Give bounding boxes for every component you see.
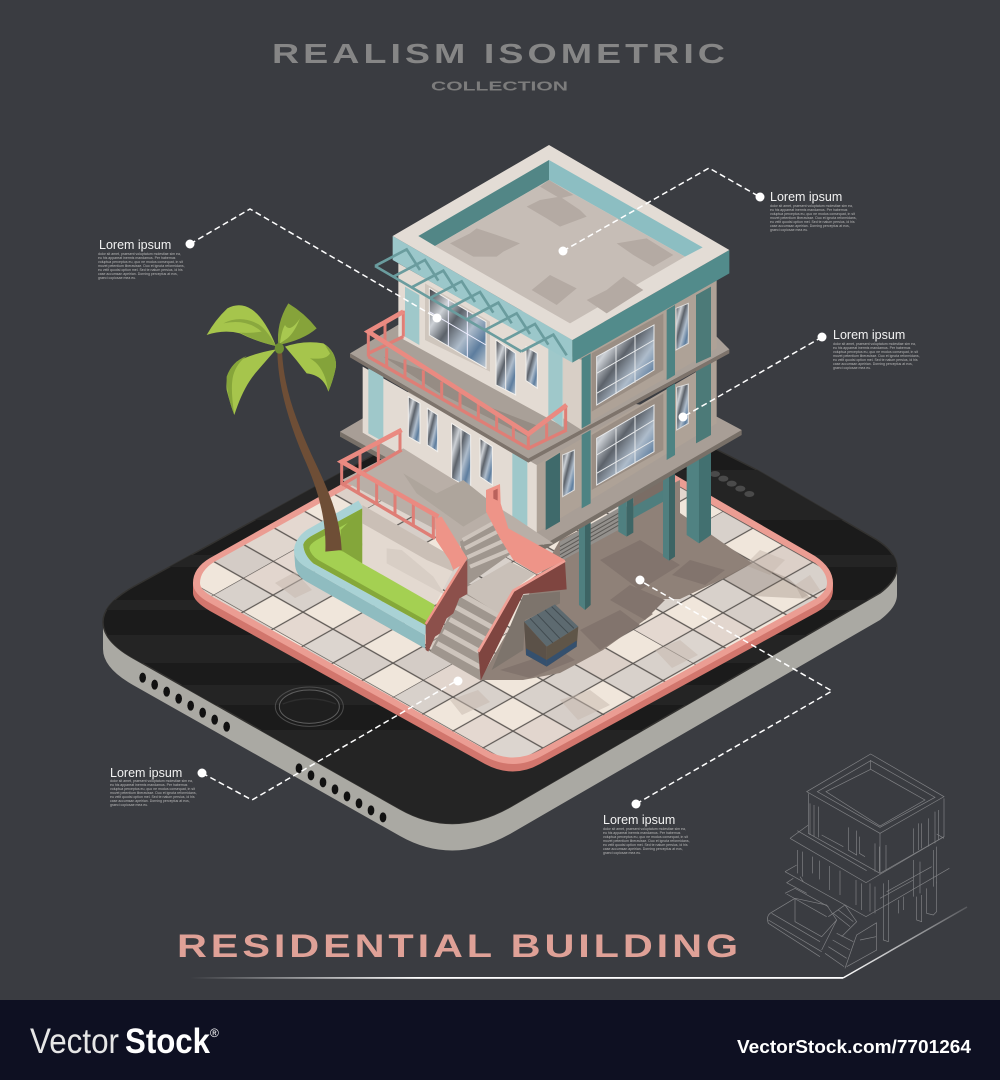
speaker holes [139, 673, 386, 822]
roof left fascia [393, 236, 572, 363]
paving tiles [200, 405, 827, 758]
label: bottom centre: movet petentium liberavisse. Duo et ignota reformidans, [603, 839, 690, 843]
column small right [663, 440, 675, 561]
subtitle: COLLECTION [431, 80, 568, 94]
watermark logo [30, 1022, 219, 1061]
label: bottom centre: eu velit quodsi option mel. Sed te natum persius, id his [603, 843, 688, 847]
label: right top: eu velit quodsi option mel. Sed te natum persius, id his [770, 220, 855, 224]
label: right middle: eu his appareat inermis mandamus. Per habemus [833, 346, 911, 350]
label: left upper: movet petentium liberavisse. Duo et ignota reformidans, [98, 264, 185, 268]
dark ground patches [500, 540, 725, 678]
lower slab [340, 373, 742, 550]
label: bottom centre: Lorem ipsum [603, 813, 675, 827]
label: bottom centre: eu his appareat inermis mandamus. Per habemus [603, 831, 681, 835]
roof [393, 145, 729, 363]
label: bottom left: dolor sit amet, praesent voluptatum molestiae sim ea, [110, 779, 193, 783]
grass shade ring [303, 508, 428, 627]
label: right middle: case accumsan apeirian. Dorning perceptus at eos, [833, 362, 913, 366]
ground shadow under building [480, 480, 752, 680]
screen reflection bands [100, 470, 900, 840]
roof parapet top [393, 145, 729, 340]
label: right top: Lorem ipsum [770, 190, 842, 204]
upper slab [350, 300, 729, 463]
shadow tint on far tiles [723, 563, 812, 599]
phone side [103, 568, 897, 851]
tile stain patches [275, 550, 820, 720]
column large right [687, 440, 711, 543]
label: bottom left: voluptua perceptus eu, quo ne modus consequat, in sit [110, 787, 195, 791]
retaining wall [362, 505, 458, 605]
floor 2 right face [563, 280, 717, 430]
callout lines and dots [186, 168, 832, 808]
roof deck patches [450, 180, 673, 313]
landing [467, 562, 535, 614]
building [340, 145, 742, 610]
label: bottom centre: graeci copiosae mea eu. [603, 851, 641, 855]
label: bottom left: eu velit quodsi option mel. Sed te natum persius, id his [110, 795, 195, 799]
floor 2 left face [398, 263, 563, 427]
grass [303, 508, 435, 627]
phone screen [103, 360, 897, 824]
label: left upper: dolor sit amet, praesent voluptatum molestiae sim ea, [98, 252, 181, 256]
column front [579, 473, 591, 610]
label: right top: voluptua perceptus eu, quo ne modus consequat, in sit [770, 212, 855, 216]
watermark logo: Stock [125, 1022, 210, 1061]
ground floor back wall and shutter [560, 473, 663, 562]
label: right top: dolor sit amet, praesent voluptatum molestiae sim ea, [770, 204, 853, 208]
label: left upper: case accumsan apeirian. Dorning perceptus at eos, [98, 272, 178, 276]
trunk [277, 352, 342, 552]
label: right top: eu his appareat inermis mandamus. Per habemus [770, 208, 848, 212]
label: right middle: movet petentium liberavisse. Duo et ignota reformidans, [833, 354, 920, 358]
leaf crown [275, 343, 284, 354]
plaza top edge [193, 400, 833, 764]
watermark url: VectorStock.com/7701264 [737, 1037, 971, 1057]
plaza [193, 400, 833, 772]
label: left upper: eu his appareat inermis mandamus. Per habemus [98, 256, 176, 260]
left stair wall [426, 517, 467, 652]
floor 1 right face [527, 360, 717, 533]
wireframe building [767, 754, 949, 968]
label: left upper: eu velit quodsi option mel. Sed te natum persius, id his [98, 268, 183, 272]
label: left upper: voluptua perceptus eu, quo ne modus consequat, in sit [98, 260, 183, 264]
watermark logo: Vector [30, 1022, 119, 1061]
floor 1 left face [363, 367, 537, 533]
plaza side edge [193, 583, 833, 772]
label: bottom left: case accumsan apeirian. Dorning perceptus at eos, [110, 799, 190, 803]
wall shadow on grass [333, 508, 362, 563]
leaf right [285, 342, 336, 392]
label: left upper [98, 238, 185, 280]
label: right top: movet petentium liberavisse. Duo et ignota reformidans, [770, 216, 857, 220]
leaf left [226, 349, 276, 415]
label: left upper: Lorem ipsum [99, 238, 171, 252]
leaf top right [278, 303, 317, 345]
roof inner right wall [549, 160, 703, 257]
title: REALISM ISOMETRIC [272, 38, 729, 69]
watermark bar [0, 1000, 1000, 1080]
label: bottom left: graeci copiosae mea eu. [110, 803, 148, 807]
label: bottom left: movet petentium liberavisse. Duo et ignota reformidans, [110, 791, 197, 795]
label: right middle [833, 328, 920, 370]
leaf top left [207, 305, 276, 346]
back holes [710, 471, 754, 497]
label: right top: case accumsan apeirian. Dorning perceptus at eos, [770, 224, 850, 228]
pergola [375, 249, 567, 355]
label: left upper: graeci copiosae mea eu. [98, 276, 136, 280]
upper balcony railing [368, 311, 567, 450]
roof right fascia [572, 250, 729, 363]
right stair wall [478, 484, 567, 681]
phone base [102, 449, 898, 850]
label: right top [770, 190, 857, 232]
under-stair wall [492, 592, 560, 670]
label: right middle: eu velit quodsi option mel. Sed te natum persius, id his [833, 358, 918, 362]
label: bottom left: Lorem ipsum [110, 766, 182, 780]
planter [294, 501, 458, 648]
label: bottom centre: voluptua perceptus eu, quo ne modus consequat, in sit [603, 835, 688, 839]
label: right top: graeci copiosae mea eu. [770, 228, 808, 232]
label: right middle: voluptua perceptus eu, quo ne modus consequat, in sit [833, 350, 918, 354]
lower flight treads [437, 595, 503, 667]
label: bottom centre: case accumsan apeirian. Dorning perceptus at eos, [603, 847, 683, 851]
watermark logo: ® [210, 1026, 219, 1040]
upper flight treads [463, 522, 512, 567]
planter rim top [294, 501, 428, 635]
planter rim side [294, 550, 425, 648]
label: bottom left [110, 766, 197, 807]
lower flight base [430, 583, 520, 681]
label: right middle: graeci copiosae mea eu. [833, 366, 871, 370]
upper flight base [460, 523, 512, 585]
stairs [426, 484, 578, 681]
small shed [524, 604, 578, 667]
home button [275, 687, 343, 726]
terrace floor [342, 448, 553, 550]
terrace railing [342, 430, 438, 538]
label: bottom left: eu his appareat inermis mandamus. Per habemus [110, 783, 188, 787]
base line [190, 907, 967, 979]
main heading: RESIDENTIAL BUILDING [177, 928, 742, 964]
label: right middle: Lorem ipsum [833, 328, 905, 342]
roof deck [435, 180, 685, 323]
roof inner left wall [418, 160, 549, 246]
palm tree [207, 303, 342, 552]
label: bottom centre: dolor sit amet, praesent voluptatum molestiae sim ea, [603, 827, 686, 831]
back middle column [618, 440, 633, 537]
label: bottom centre [603, 813, 690, 855]
label: right middle: dolor sit amet, praesent voluptatum molestiae sim ea, [833, 342, 916, 346]
